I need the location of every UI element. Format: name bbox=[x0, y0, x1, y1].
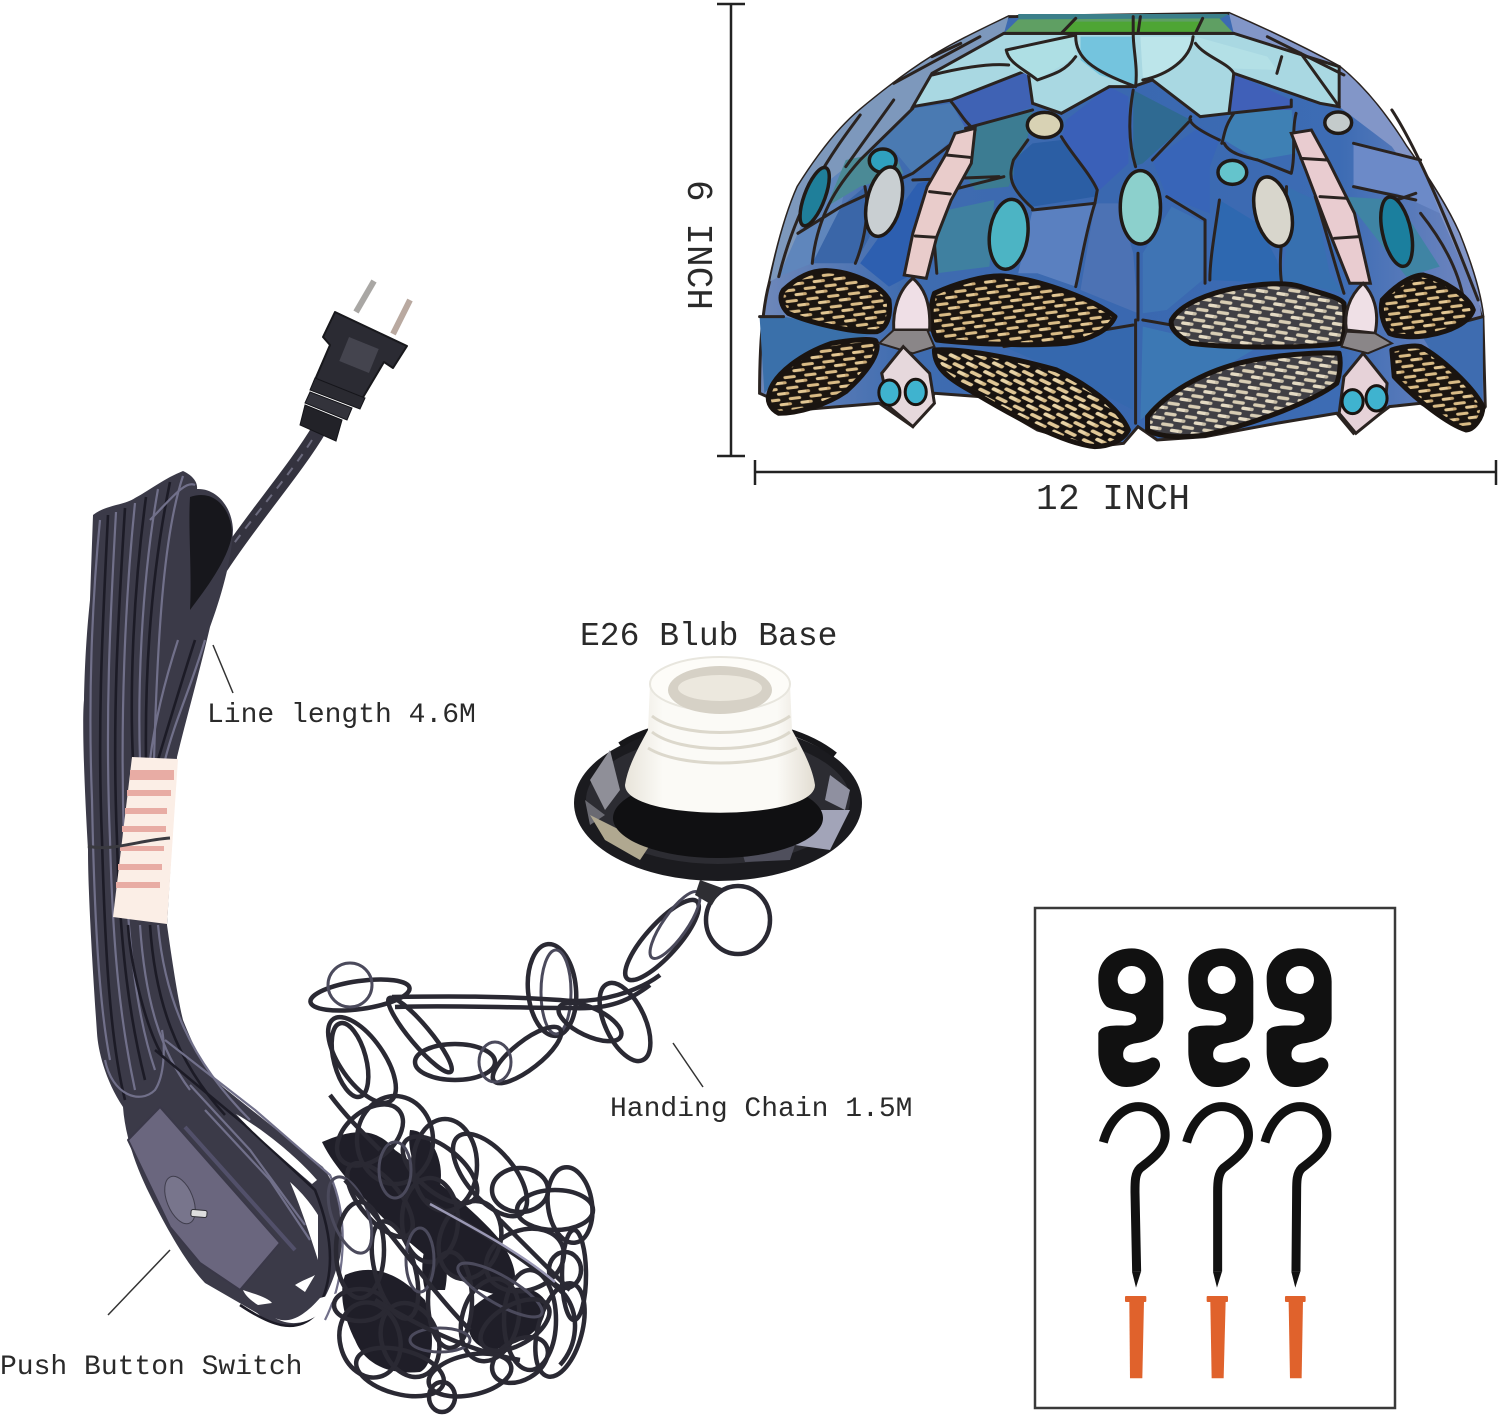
jewels bbox=[794, 112, 1418, 270]
width dimension arrow bbox=[755, 460, 1496, 485]
ceiling ring and upper links bbox=[309, 880, 770, 1114]
socket rim bbox=[574, 722, 862, 881]
panel border bbox=[1035, 908, 1395, 1408]
centre petals bbox=[1009, 37, 1277, 87]
left dragonfly wings bbox=[768, 271, 1128, 447]
socket: E26 bulb base bbox=[574, 657, 862, 881]
right dragonfly wings bbox=[1148, 275, 1483, 437]
light blue band bbox=[913, 33, 1339, 117]
left dragonfly tail bbox=[904, 128, 975, 278]
push button switch bbox=[128, 1107, 295, 1290]
dark core of tangle bbox=[322, 1130, 546, 1373]
left dragonfly body and eyes bbox=[879, 278, 934, 427]
left dragonfly bbox=[768, 128, 1128, 447]
hardware panel bbox=[1035, 908, 1395, 1408]
green collar bbox=[1004, 14, 1234, 33]
wire tie bbox=[88, 838, 170, 848]
height dimension arrow bbox=[717, 3, 745, 457]
shade dome body bbox=[760, 13, 1485, 447]
hanging chain bbox=[309, 880, 770, 1412]
label: line length: Line length 4.6M bbox=[207, 700, 476, 731]
tangled chain pile bbox=[319, 1092, 597, 1412]
label: hanging chain: Handing Chain 1.5M bbox=[610, 1094, 912, 1125]
lead lines bbox=[760, 17, 1483, 423]
label: 12 inch: 12 INCH bbox=[1036, 479, 1190, 520]
black collar bbox=[613, 778, 823, 858]
tag band bbox=[113, 757, 178, 924]
white threaded neck bbox=[625, 657, 815, 813]
callout line: switch bbox=[108, 1250, 170, 1315]
gaps between cords bbox=[236, 1114, 338, 1323]
right dragonfly bbox=[1148, 130, 1483, 437]
flank panels bbox=[770, 13, 1483, 317]
screw hooks bbox=[1103, 1107, 1327, 1288]
right dragonfly body and eyes bbox=[1339, 283, 1392, 433]
callout line: chain bbox=[673, 1043, 703, 1087]
plug body bbox=[300, 312, 407, 441]
wall anchors bbox=[1125, 1296, 1306, 1378]
plug cable bbox=[172, 428, 320, 645]
label: 6 inch: 6 INCH bbox=[677, 180, 718, 310]
coiled cord bundle bbox=[83, 471, 342, 1325]
swag hooks bbox=[1098, 948, 1332, 1087]
callout line: cord bbox=[213, 645, 233, 693]
cord highlights bbox=[90, 476, 343, 1326]
right dragonfly tail bbox=[1291, 130, 1370, 283]
label: E26 bulb base: E26 Blub Base bbox=[580, 618, 837, 655]
lamp shade bbox=[760, 13, 1485, 447]
label: push button switch: Push Button Switch bbox=[0, 1352, 302, 1383]
plug prongs bbox=[356, 281, 410, 334]
coloured glass panels bbox=[760, 70, 1483, 420]
power cord bbox=[83, 281, 410, 1326]
